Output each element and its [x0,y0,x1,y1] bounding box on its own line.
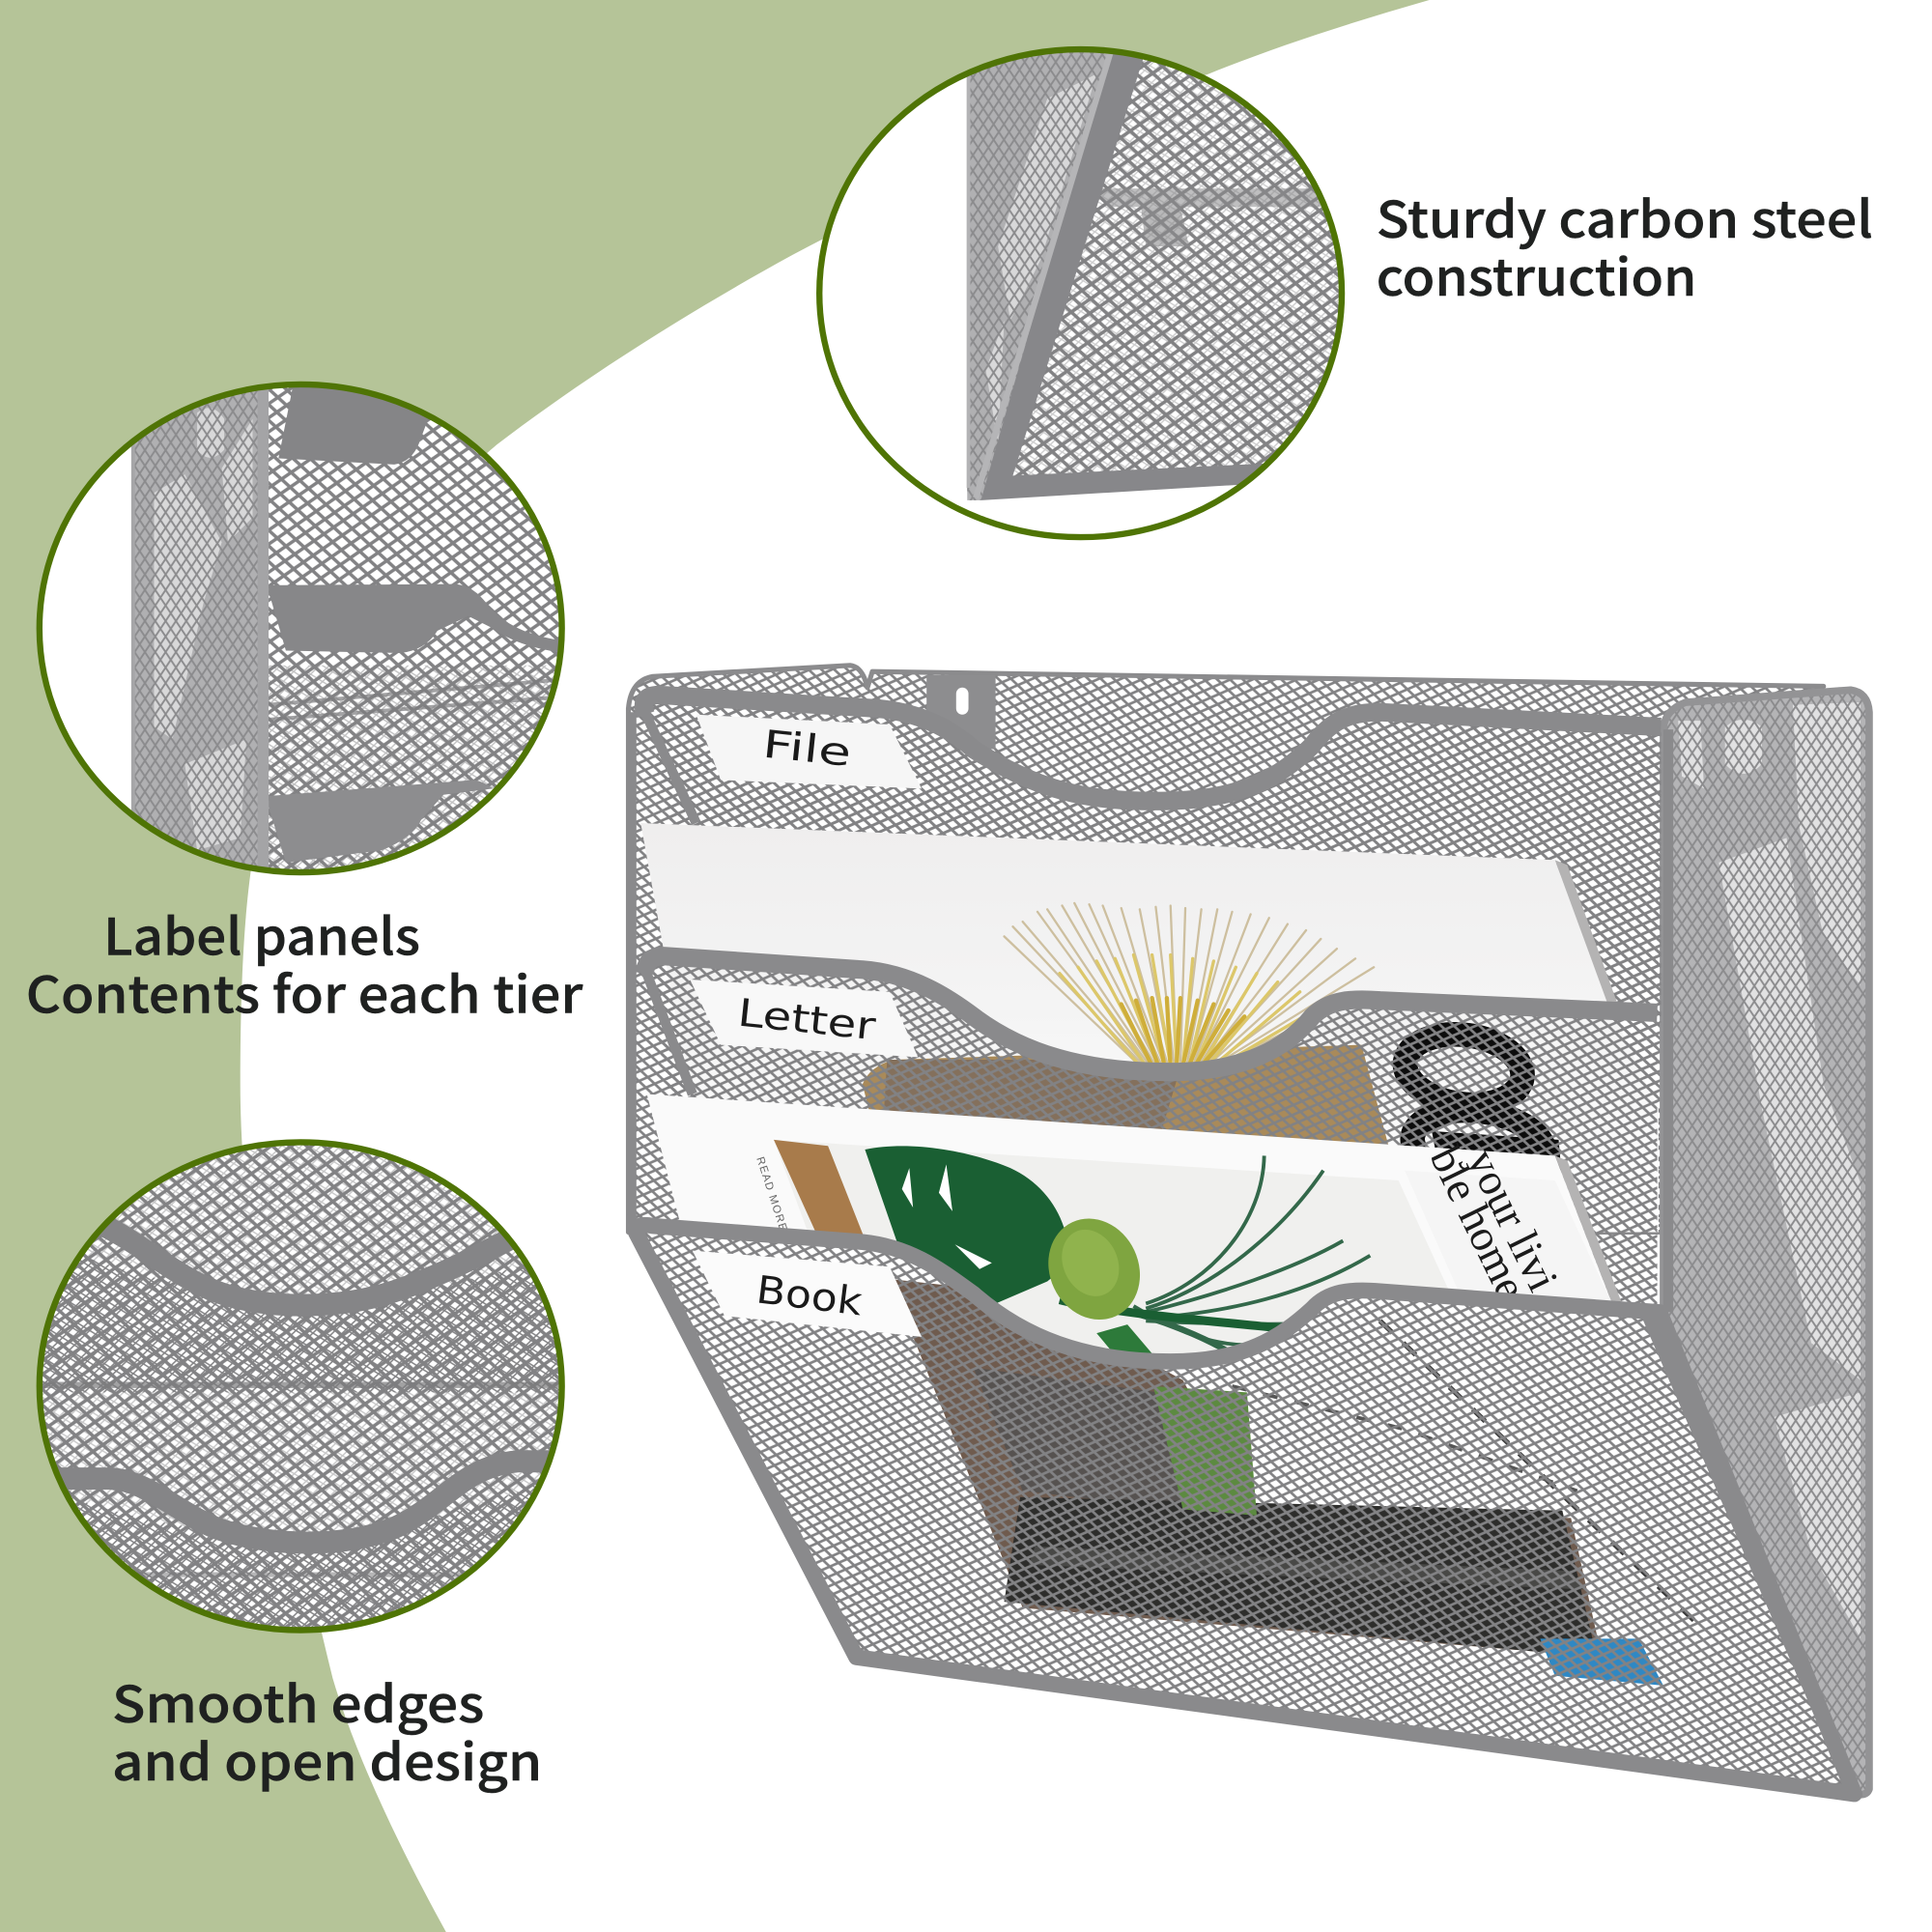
label: Book: Book [753,1267,865,1324]
tier band two [269,584,564,653]
label: File: File [760,723,853,776]
wood panel [774,1140,865,1239]
vertical rail [258,370,269,887]
hanging hook plate [926,675,996,750]
curved band two [49,1462,567,1543]
rotated magazine text: your livi [1458,1141,1568,1298]
coarse mesh [37,1140,567,1633]
right side panel [1663,690,1869,1795]
label plate one [278,387,427,465]
second mesh layer [37,1238,567,1633]
large mesh face [1014,60,1339,475]
detail circle: carbon steel corner [819,37,1355,537]
right front rail [1641,729,1863,1797]
caption: label panels: Label panels [103,897,420,971]
artwork behind second pocket [863,1027,1562,1189]
yellow fan plant [1005,903,1374,1065]
back mesh [269,387,558,869]
detail circle: label panels [40,370,577,887]
caption: smooth edges [112,1664,542,1796]
thin grass blades [1060,1155,1370,1361]
caption: carbon steel: Sturdy carbon steel [1377,180,1873,253]
lower leaf [1096,1324,1155,1358]
caption: smooth edges: Smooth edges [112,1664,484,1738]
second tier pocket [640,955,1658,1306]
flower ball [1032,1204,1156,1335]
black numeral showing through [1393,1022,1554,1148]
left edge rail [632,712,639,1236]
top tier pocket [642,695,1661,1023]
main product: wall file organizer [629,666,1869,1799]
narrow side mesh [967,37,1118,500]
side mesh [135,391,258,866]
label: Book [693,1251,922,1337]
detail circle: smooth edges [37,1140,567,1633]
magazine one with yellow plant [640,823,1659,1233]
caption: label panels: Contents for each tier [26,954,583,1028]
tier band three [269,780,493,863]
label: Letter: Letter [736,991,878,1049]
bottom tier pocket [636,1225,1855,1794]
green curved background [0,0,1430,1932]
label: File [696,715,922,788]
caption: smooth edges: and open design [112,1722,542,1796]
small spine text: READ MORE [753,1155,789,1234]
caption: carbon steel: construction [1377,238,1696,311]
caption: carbon steel [1377,180,1873,311]
curved band one [96,1222,524,1305]
label: Letter [690,980,918,1057]
page image area [774,1140,1479,1380]
diagonal frame [980,42,1269,500]
horizontal rail [37,1382,567,1387]
artwork seen through bottom pocket [647,1233,1696,1685]
back mesh panel [629,666,1824,1233]
caption: label panels [26,897,583,1028]
monstera leaf [865,1146,1069,1319]
rotated magazine text: ble home [1421,1138,1537,1307]
double rail [269,680,554,720]
magazine two with green plant [647,1094,1638,1405]
